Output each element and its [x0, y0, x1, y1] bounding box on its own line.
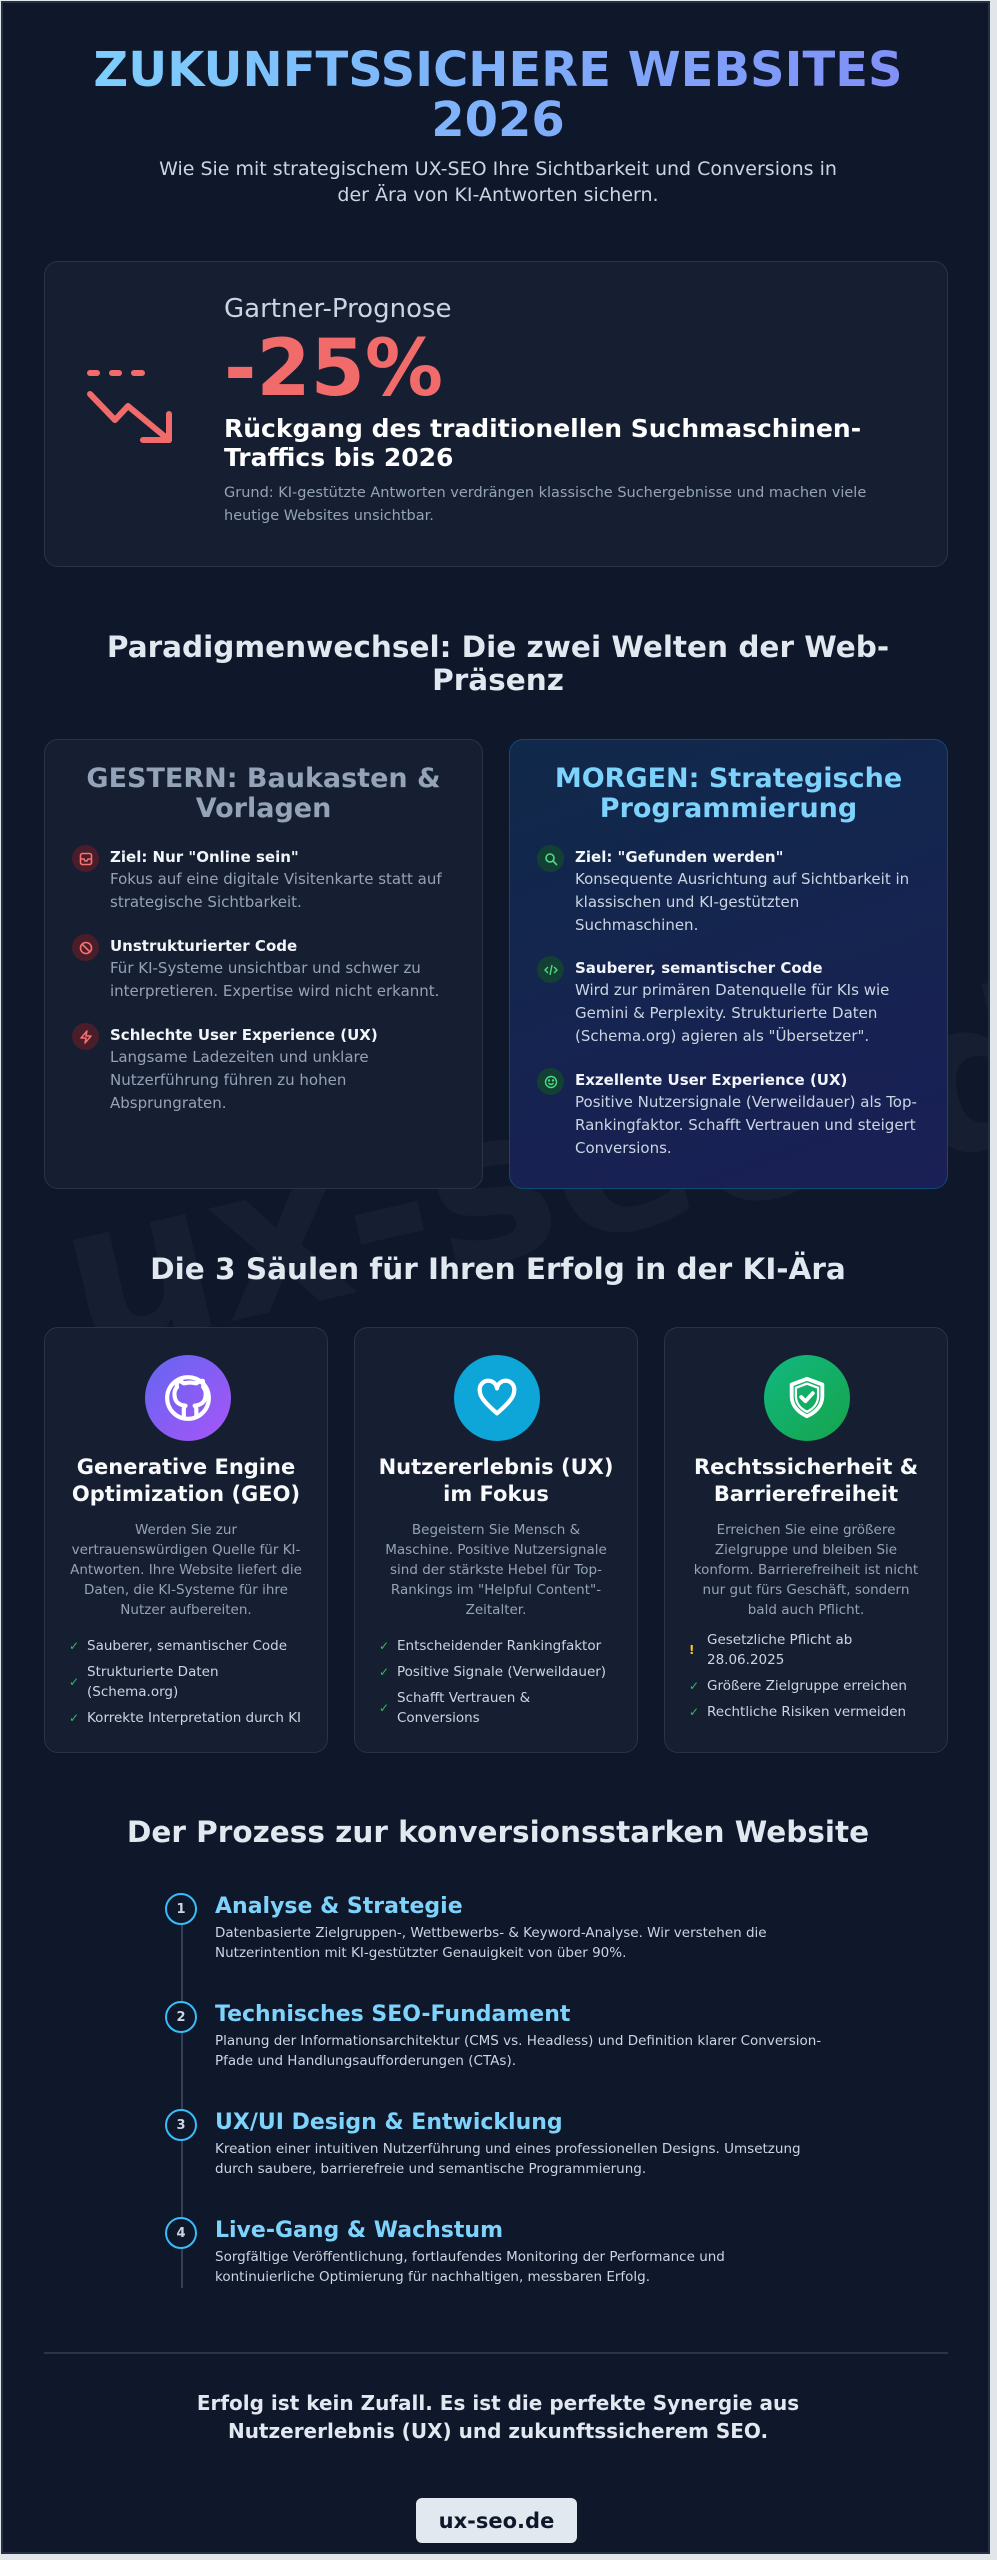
checklist: Entscheidender Rankingfaktor	[397, 1638, 601, 1654]
step 2: 2	[176, 2010, 186, 2024]
checklist	[70, 1638, 301, 1726]
pillar title: im Fokus	[443, 1482, 549, 1506]
timeline line	[181, 1908, 183, 2288]
closing statement: Erfolg ist kein Zufall. Es ist die perfekte Synergie aus Nutzererlebnis (UX) und zukunftssicherem SEO.	[197, 2391, 799, 2443]
button: ux-seo.de	[416, 2498, 577, 2543]
checklist	[380, 1638, 606, 1726]
checklist: Sauberer, semantischer Code	[87, 1638, 287, 1654]
step 2: Planung der Informationsarchitektur (CMS vs. Headless) und Definition klarer Conversion-	[215, 2033, 821, 2049]
item: gefunden werden: Ziel: "Gefunden werden"	[575, 848, 783, 866]
panel: morgen	[509, 739, 948, 1189]
icon: heart	[454, 1355, 540, 1441]
heading: prozess: Der Prozess zur konversionsstarken Website	[127, 1815, 869, 1849]
step 1: Analyse & Strategie	[215, 1894, 463, 1919]
checklist: Positive Signale (Verweildauer)	[397, 1664, 606, 1680]
heading: 3 saeulen: Die 3 Säulen für Ihren Erfolg in der KI-Ära	[150, 1252, 846, 1286]
checklist: Schafft Vertrauen &	[397, 1690, 530, 1706]
step 1: Datenbasierte Zielgruppen-, Wettbewerbs- & Keyword-Analyse. Wir verstehen die	[215, 1925, 767, 1941]
heading gestern: GESTERN: Baukasten & Vorlagen	[86, 763, 441, 824]
checklist	[690, 1632, 907, 1720]
item: ziel online: Ziel: Nur "Online sein"	[110, 848, 299, 866]
stat text: Grund: KI-gestützte Antworten verdrängen klassische Suchergebnisse und machen viele heutige Websites unsichtbar.	[224, 485, 866, 524]
step 1	[165, 1893, 767, 1961]
stat text	[224, 294, 866, 524]
step 2: Technisches SEO-Fundament	[215, 2002, 570, 2027]
item: ziel online	[72, 845, 442, 911]
panel: pillar UX	[354, 1327, 638, 1753]
item: gefunden werden: Konsequente Ausrichtung auf Sichtbarkeit in klassischen und KI-gestützten Suchmaschinen.	[575, 870, 909, 934]
item: schlechte ux: Langsame Ladezeiten und unklare Nutzerführung führen zu hohen Absprungraten.	[110, 1048, 369, 1112]
item: ziel online: Fokus auf eine digitale Visitenkarte statt auf strategische Sichtbarkeit.	[110, 870, 442, 911]
item: schlechte ux: Schlechte User Experience (UX)	[110, 1026, 378, 1044]
checklist: 28.06.2025	[707, 1652, 784, 1668]
item: unstrukturierter code	[72, 934, 439, 1000]
item: exzellente ux: Positive Nutzersignale (Verweildauer) als Top-Rankingfaktor. Schafft Vertrauen und steigert Conversions.	[575, 1093, 917, 1157]
step 4: 4	[176, 2226, 186, 2240]
checklist: Conversions	[397, 1710, 480, 1726]
item: exzellente ux: Exzellente User Experience (UX)	[575, 1071, 847, 1089]
pillar text: Begeistern Sie Mensch & Maschine. Positive Nutzersignale sind der stärkste Hebel für Top-Rankings im "Helpful Content"-Zeitalter.	[385, 1522, 607, 1618]
step 4	[165, 2217, 725, 2285]
pillar title: Nutzererlebnis (UX)	[379, 1455, 613, 1479]
checklist: Größere Zielgruppe erreichen	[707, 1678, 907, 1694]
step 3: durch saubere, barrierefreie und semantische Programmierung.	[215, 2161, 646, 2177]
heading: paradigm shift: Paradigmenwechsel: Die zwei Welten der Web-Präsenz	[107, 630, 889, 697]
step 2	[165, 2001, 821, 2069]
stat text: Rückgang des traditionellen Suchmaschinen-Traffics bis 2026	[224, 414, 861, 472]
pillar text: Werden Sie zur vertrauenswürdigen Quelle für KI-Antworten. Ihre Website liefert die Daten, die KI-Systeme für ihre Nutzer aufbereiten.	[70, 1522, 302, 1618]
pillar text: Erreichen Sie eine größere Zielgruppe und bleiben Sie konform. Barrierefreiheit ist nicht nur gut fürs Geschäft, sondern bald auch Pflicht.	[694, 1522, 918, 1618]
heading morgen: MORGEN: Strategische Programmierung	[555, 763, 902, 824]
panel: gartner forecast	[44, 261, 948, 567]
pillar title	[379, 1455, 613, 1506]
step 3: 3	[176, 2118, 186, 2132]
icon: shield	[764, 1355, 850, 1441]
pillar title: Rechtssicherheit &	[694, 1455, 918, 1479]
step 1: Nutzerintention mit KI-gestützter Genauigkeit von über 90%.	[215, 1945, 626, 1961]
pillar title	[72, 1455, 300, 1506]
icon: trend down	[87, 370, 172, 443]
pillar title: Generative Engine	[77, 1455, 295, 1479]
step 4: Sorgfältige Veröffentlichung, fortlaufendes Monitoring der Performance und	[215, 2249, 725, 2265]
step 4: kontinuierliche Optimierung für nachhaltigen, messbaren Erfolg.	[215, 2269, 650, 2285]
subtitle: Wie Sie mit strategischem UX-SEO Ihre Sichtbarkeit und Conversions in der Ära von KI-Antworten sichern.	[159, 158, 837, 206]
panel: pillar GEO	[44, 1327, 328, 1753]
item: semantischer code: Sauberer, semantischer Code	[575, 959, 823, 977]
item: semantischer code: Wird zur primären Datenquelle für KIs wie Gemini & Perplexity. Strukturierte Daten (Schema.org) agieren als "Übersetzer".	[575, 981, 889, 1045]
step 3: Kreation einer intuitiven Nutzerführung und eines professionellen Designs. Umsetzung	[215, 2141, 801, 2157]
step 4: Live-Gang & Wachstum	[215, 2218, 503, 2243]
step 3	[165, 2109, 801, 2177]
checklist: Strukturierte Daten	[87, 1664, 219, 1680]
button: ux-seo.de: ux-seo.de	[439, 2508, 554, 2532]
item: unstrukturierter code: Unstrukturierter Code	[110, 937, 297, 955]
item: exzellente ux	[537, 1068, 917, 1157]
checklist: (Schema.org)	[87, 1684, 178, 1700]
step 3: UX/UI Design & Entwicklung	[215, 2110, 563, 2135]
icon: github	[145, 1355, 231, 1441]
checklist: Rechtliche Risiken vermeiden	[707, 1704, 906, 1720]
step 1: 1	[176, 1902, 186, 1916]
checklist: Gesetzliche Pflicht ab	[707, 1632, 852, 1648]
pillar title	[694, 1455, 918, 1506]
item: gefunden werden	[537, 845, 909, 934]
pillar title: Barrierefreiheit	[714, 1482, 898, 1506]
panel: gestern	[44, 739, 483, 1189]
item: semantischer code	[537, 956, 889, 1045]
item: unstrukturierter code: Für KI-Systeme unsichtbar und schwer zu interpretieren. Expertise wird nicht erkannt.	[110, 959, 439, 1000]
title: ZUKUNFTSSICHERE WEBSITES 2026	[93, 42, 903, 148]
item: schlechte ux	[72, 1023, 378, 1112]
checklist: Korrekte Interpretation durch KI	[87, 1710, 301, 1726]
stat text: -25%	[224, 324, 443, 414]
pillar title: Optimization (GEO)	[72, 1482, 300, 1506]
panel: pillar legal	[664, 1327, 948, 1753]
stat text: Gartner-Prognose	[224, 294, 452, 324]
step 2: Pfade und Handlungsaufforderungen (CTAs).	[215, 2053, 516, 2069]
